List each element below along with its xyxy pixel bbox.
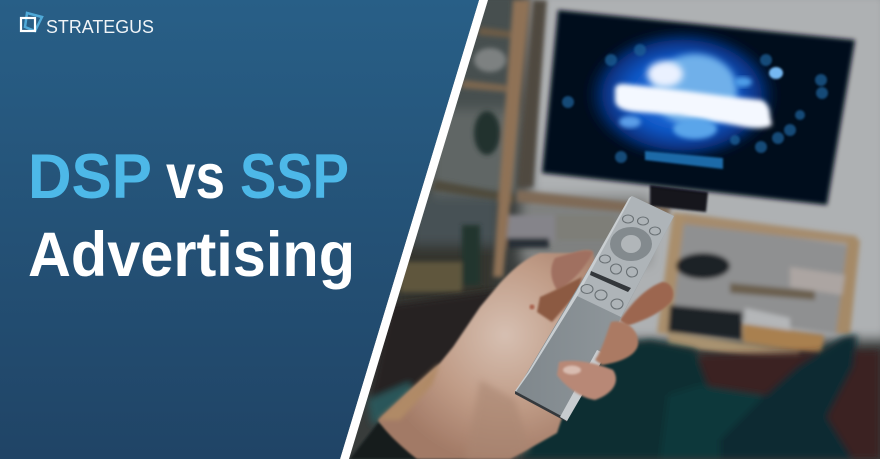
logo icon <box>21 13 42 31</box>
remote <box>515 196 674 422</box>
remote buttons <box>581 215 660 309</box>
sleeve <box>350 423 420 459</box>
television <box>542 10 855 212</box>
remote dpad <box>610 227 652 261</box>
right shelves <box>657 212 860 364</box>
palm spot <box>530 304 534 310</box>
tv logo blur <box>615 84 772 128</box>
left blue panel <box>0 0 479 459</box>
tv screen <box>542 10 855 205</box>
remote edge highlight <box>560 350 606 421</box>
tv subtitle bar <box>645 151 723 169</box>
logo <box>21 13 154 37</box>
wrist shading <box>378 363 440 420</box>
far finger <box>620 282 673 326</box>
tv glow <box>584 27 780 163</box>
title line 1 <box>28 142 349 212</box>
floor and sofa <box>368 290 880 459</box>
remote divider <box>590 271 631 292</box>
palm shadow <box>537 277 582 322</box>
title line 1: SSP <box>240 142 349 212</box>
white divider stripe <box>340 0 488 459</box>
background photo: living room <box>330 0 880 459</box>
logo wordmark: STRATEGUS <box>46 17 154 37</box>
remote left edge <box>515 196 632 393</box>
tv bokeh <box>562 44 828 163</box>
index finger <box>595 321 638 365</box>
remote bottom edge <box>515 391 567 422</box>
thumb shading <box>551 251 593 290</box>
title line 1: vs <box>166 142 225 212</box>
title line 2: Advertising <box>28 220 355 290</box>
remote body <box>515 196 674 421</box>
remote top panel <box>575 196 674 317</box>
ring finger <box>557 361 616 400</box>
hand back and palm <box>378 250 600 459</box>
title line 1: DSP <box>28 142 152 212</box>
tv stand <box>650 185 708 212</box>
title <box>28 142 355 290</box>
wall <box>395 0 880 340</box>
fingernail <box>563 366 581 374</box>
left shelves <box>400 0 670 292</box>
hand <box>378 250 600 459</box>
